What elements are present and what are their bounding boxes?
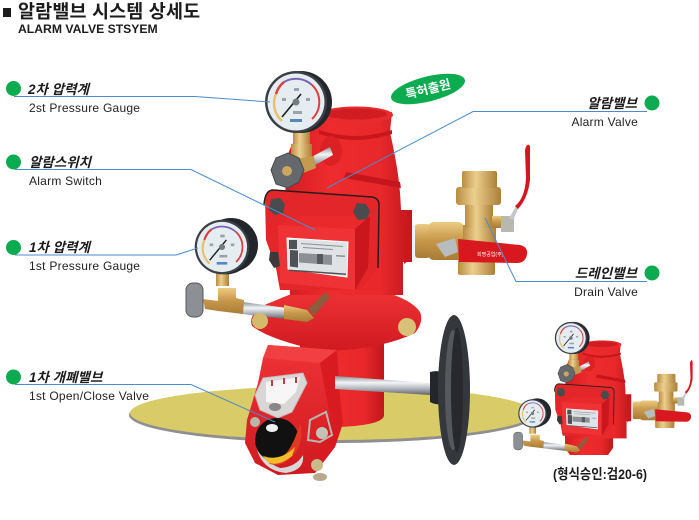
callout: alarm valve: Alarm Valve [571,115,638,129]
upper valve assembly [186,71,530,322]
callout: 2nd pressure gauge [6,81,270,115]
callout: alarm valve [327,96,660,188]
black ball with red and yellow [255,418,303,473]
subtitle: ALARM VALVE STSYEM [18,22,158,36]
handle housing [245,345,343,475]
callout: 2nd pressure gauge: 2st Pressure Gauge [29,101,140,115]
callout: 2nd pressure gauge: 2차 압력계 [27,82,92,97]
main alarm valve [186,71,530,481]
callout: 1st pressure gauge: 1st Pressure Gauge [29,259,140,273]
steel rod [335,376,430,395]
lower flange [251,288,421,351]
drain handle maker text: 회명공업(주) [477,251,504,258]
small valve [514,322,693,455]
yellow base disc [129,386,535,443]
hand wheel [430,315,470,465]
small valve lower body [565,420,613,455]
callout: 1st open/close valve [6,370,275,422]
callout: drain valve: 드레인밸브 [575,266,639,281]
callout: drain valve: Drain Valve [574,285,638,299]
small valve assembly [514,322,693,452]
callout: 1st pressure gauge: 1차 압력계 [29,240,93,255]
sight glass [255,373,307,418]
housing screws [250,412,332,481]
approval caption: (형식승인:검20-6) [553,466,647,482]
patent badge [388,68,468,110]
callout: 1st open/close valve: 1st Open/Close Valve [29,389,149,403]
callout: alarm valve: 알람밸브 [587,96,639,111]
callout: 1st open/close valve: 1차 개폐밸브 [29,370,104,385]
patent badge: 특허출원 [404,77,452,102]
callout: alarm switch [6,154,315,230]
callout: drain valve [485,218,660,299]
callout: 1st pressure gauge [6,240,198,273]
title: 알람밸브 시스템 상세도 [18,1,200,22]
lower cylinder [300,340,384,427]
callout: alarm switch: Alarm Switch [29,174,102,188]
flange bolts [252,313,416,336]
callout: alarm switch: 알람스위치 [29,155,93,170]
title icon square [3,8,11,17]
